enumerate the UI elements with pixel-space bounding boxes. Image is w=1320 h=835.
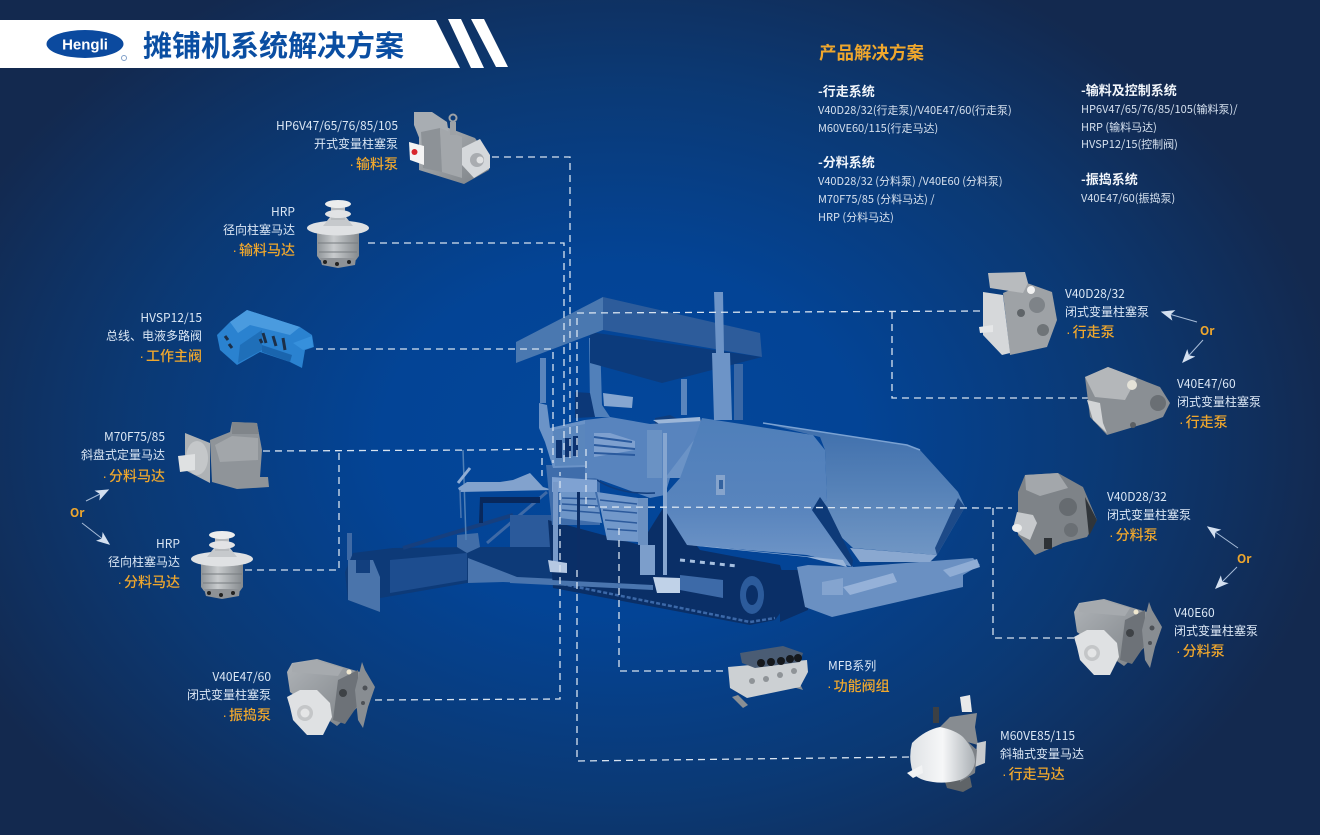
hopper wing bbox=[763, 423, 965, 562]
block: distribution system: HRP (分料马达) bbox=[818, 209, 894, 225]
header stripes bbox=[448, 19, 508, 68]
block: feed and control system: HRP (输料马达) bbox=[1081, 119, 1157, 135]
connector: V40E vibration pump to machine bbox=[375, 472, 560, 700]
panel: product solutions bbox=[818, 40, 1238, 225]
icon: MFB valve group bbox=[728, 646, 808, 708]
cab seat and box bbox=[575, 392, 703, 432]
label: M70F motor bbox=[81, 428, 165, 486]
connector: HRP feed motor to machine bbox=[368, 243, 564, 463]
connector: MFB valve group to machine bbox=[619, 528, 725, 671]
label: V40E vibration pump: 闭式变量柱塞泵 bbox=[187, 686, 271, 703]
label: V40E60 pump: V40E60 bbox=[1174, 604, 1215, 621]
icon: M60VE motor bbox=[907, 695, 986, 792]
icon: HRP distribution motor bbox=[191, 531, 253, 599]
logo: Hengli: Hengli bbox=[62, 36, 108, 54]
label: HVSP valve: ·工作主阀 bbox=[139, 346, 202, 366]
label: V40D distribution pump bbox=[1107, 488, 1191, 545]
label: V40D distribution pump: 闭式变量柱塞泵 bbox=[1107, 506, 1191, 523]
connector: HVSP main valve to machine bbox=[316, 349, 553, 463]
label: V40D distribution pump: V40D28/32 bbox=[1107, 488, 1167, 505]
connector: M70F distribution motor to machine bbox=[263, 449, 542, 476]
connector: second travel pump branch bbox=[892, 312, 1090, 398]
label: HRP feed motor bbox=[223, 203, 295, 260]
block: vibration system: -振捣系统 bbox=[1081, 169, 1138, 188]
icon: V40D distribution pump bbox=[1012, 473, 1097, 555]
icon: V40D travel pump bbox=[979, 272, 1057, 355]
screed and tow arms bbox=[345, 450, 580, 612]
label: V40E vibration pump bbox=[187, 668, 271, 725]
label: V40E travel pump: 闭式变量柱塞泵 bbox=[1177, 393, 1261, 410]
block: travel system: V40D28/32(行走泵)/V40E47/60(行走泵) bbox=[818, 102, 1012, 118]
block: feed and control system: -输料及控制系统 bbox=[1081, 80, 1177, 99]
icon: V40E vibration pump bbox=[287, 659, 375, 735]
label: HVSP valve: 总线、电液多路阀 bbox=[106, 327, 202, 344]
label: V40D travel pump: 闭式变量柱塞泵 bbox=[1065, 303, 1149, 320]
header banner bbox=[0, 19, 508, 68]
label: V40E travel pump bbox=[1177, 375, 1261, 432]
banner bar bbox=[0, 20, 460, 68]
engine compartment bbox=[585, 417, 707, 498]
label: HRP distribution motor: 径向柱塞马达 bbox=[108, 553, 180, 570]
label: Or upper right: Or bbox=[1200, 322, 1215, 339]
label: V40D distribution pump: ·分料泵 bbox=[1109, 525, 1158, 545]
icon: V40E60 pump bbox=[1074, 599, 1162, 675]
label: HRP feed motor: ·输料马达 bbox=[232, 240, 295, 260]
icon: V40E travel pump bbox=[1085, 367, 1170, 435]
connector: travel pumps to canopy run bbox=[577, 311, 980, 457]
label: HP6V pump: ·输料泵 bbox=[349, 154, 398, 174]
label: M70F motor: 斜盘式定量马达 bbox=[81, 446, 165, 463]
label: M60VE motor bbox=[1000, 727, 1084, 784]
connector: V40E60 distribution pump branch bbox=[993, 508, 1075, 638]
lower body grilles bbox=[548, 477, 648, 578]
arrow: Or to M70F bbox=[86, 490, 108, 501]
block: distribution system: M70F75/85 (分料马达) / bbox=[818, 191, 935, 207]
label: V40E60 pump: ·分料泵 bbox=[1176, 641, 1225, 661]
label: V40E60 pump: 闭式变量柱塞泵 bbox=[1174, 622, 1258, 639]
logo: Hengli bbox=[46, 30, 126, 60]
label: M70F motor: M70F75/85 bbox=[104, 428, 165, 445]
arrow: Or to V40D travel bbox=[1162, 312, 1197, 322]
block: travel system: M60VE60/115(行走马达) bbox=[818, 120, 938, 136]
label: V40E vibration pump: ·振捣泵 bbox=[222, 705, 271, 725]
canopy bbox=[516, 297, 762, 383]
title: 摊铺机系统解决方案 bbox=[143, 23, 404, 65]
label: V40D travel pump bbox=[1065, 285, 1149, 342]
label: MFB valve group bbox=[827, 657, 890, 696]
icon: HVSP valve bbox=[217, 310, 314, 368]
label: HP6V pump: HP6V47/65/76/85/105 bbox=[276, 117, 398, 134]
label: V40D travel pump: ·行走泵 bbox=[1066, 322, 1115, 342]
label: HRP feed motor: HRP bbox=[271, 203, 295, 220]
block: travel system bbox=[818, 81, 1012, 136]
label: HVSP valve: HVSP12/15 bbox=[140, 309, 202, 326]
block: vibration system bbox=[1081, 169, 1175, 206]
label: HRP distribution motor: HRP bbox=[156, 535, 180, 552]
left cab column bbox=[539, 403, 585, 468]
label: V40D travel pump: V40D28/32 bbox=[1065, 285, 1125, 302]
icon: HRP feed motor bbox=[307, 200, 369, 268]
label: HP6V pump bbox=[276, 117, 398, 174]
label: Or lower right: Or bbox=[1237, 550, 1252, 567]
canopy posts bbox=[540, 338, 743, 420]
connector: distribution pumps to machine bbox=[586, 449, 1012, 508]
block: distribution system: -分料系统 bbox=[818, 152, 875, 171]
arrow: Or to HRP bbox=[82, 523, 109, 544]
label: V40E vibration pump: V40E47/60 bbox=[212, 668, 271, 685]
label: HP6V pump: 开式变量柱塞泵 bbox=[314, 135, 398, 152]
connector: HRP distribution motor branch bbox=[245, 453, 339, 570]
paver machine silhouette bbox=[345, 292, 980, 625]
arrow: Or to V40E travel bbox=[1183, 340, 1203, 362]
block: distribution system: V40D28/32 (分料泵) /V40E60 (分料泵) bbox=[818, 173, 1003, 189]
arrow: Or to V40D distribution bbox=[1208, 527, 1238, 548]
block: travel system: -行走系统 bbox=[818, 81, 875, 100]
exhaust stack bbox=[712, 292, 732, 420]
connector: HP6V feed pump to machine bbox=[492, 157, 570, 463]
crawler track and undercarriage bbox=[510, 505, 808, 625]
side rods and feet bbox=[653, 433, 680, 593]
label: V40E travel pump: V40E47/60 bbox=[1177, 375, 1236, 392]
label: HRP feed motor: 径向柱塞马达 bbox=[223, 221, 295, 238]
body backing bbox=[546, 465, 600, 525]
label: MFB valve group: MFB系列 bbox=[828, 657, 876, 674]
panel heading: 产品解决方案 bbox=[819, 40, 924, 65]
block: distribution system bbox=[818, 152, 1003, 225]
label: M60VE motor: 斜轴式变量马达 bbox=[1000, 745, 1084, 762]
arrow: Or to V40E60 bbox=[1216, 567, 1237, 588]
label: M60VE motor: ·行走马达 bbox=[1002, 764, 1065, 784]
front apron and rollers bbox=[797, 558, 980, 617]
label: V40E travel pump: ·行走泵 bbox=[1179, 412, 1228, 432]
icon: M70F motor bbox=[178, 422, 269, 489]
block: feed and control system: HP6V47/65/76/85/105(输料泵)/ bbox=[1081, 101, 1238, 117]
label: M60VE motor: M60VE85/115 bbox=[1000, 727, 1075, 744]
block: feed and control system bbox=[1081, 80, 1238, 152]
icon: HP6V pump bbox=[409, 112, 490, 184]
label: Or left: Or bbox=[70, 504, 85, 521]
label: HRP distribution motor bbox=[108, 535, 180, 592]
label: M70F motor: ·分料马达 bbox=[102, 466, 165, 486]
label: HVSP valve bbox=[106, 309, 202, 366]
label: V40E60 pump bbox=[1174, 604, 1258, 661]
label: HRP distribution motor: ·分料马达 bbox=[117, 572, 180, 592]
block: vibration system: V40E47/60(振捣泵) bbox=[1081, 190, 1175, 206]
connector: M60VE travel motor to machine bbox=[577, 570, 910, 761]
block: feed and control system: HVSP12/15(控制阀) bbox=[1081, 136, 1178, 152]
hopper side bbox=[665, 418, 853, 567]
label: MFB valve group: ·功能阀组 bbox=[827, 676, 890, 696]
